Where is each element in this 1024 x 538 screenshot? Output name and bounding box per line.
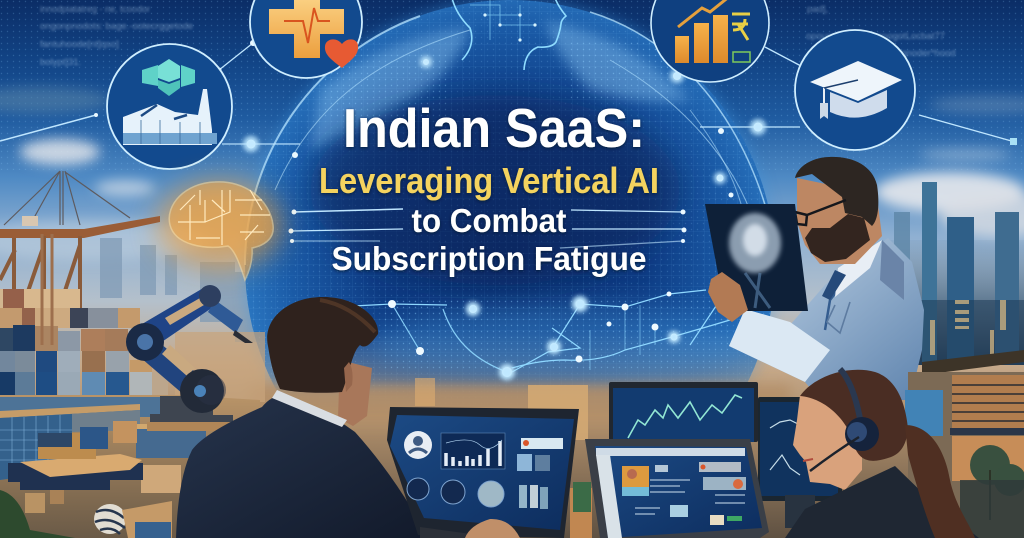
port yard ground xyxy=(0,395,260,538)
port wall with blue glass xyxy=(0,397,170,480)
lower link xyxy=(134,335,205,400)
hexagon cubes xyxy=(142,59,195,96)
hair xyxy=(800,370,908,461)
code text top left: innodpiatatreg - ne, tcoodor xyxy=(40,4,150,14)
jacket xyxy=(785,466,979,538)
right skyline xyxy=(880,182,1024,365)
gauge dials xyxy=(407,478,504,507)
front left laptop xyxy=(387,407,579,538)
medical cross xyxy=(269,0,344,58)
code text top left: fantuhoode[nt]qso] xyxy=(40,39,119,50)
title backdrop glow xyxy=(310,95,680,285)
background data grid xyxy=(0,0,1024,170)
small tree xyxy=(970,445,1010,485)
jacket xyxy=(176,396,428,538)
upper link xyxy=(137,287,216,350)
front right laptop xyxy=(585,439,769,538)
code text top right: opoussflocfallon.opogotLocbat77 xyxy=(806,31,945,42)
title line 1: Indian SaaS: xyxy=(343,97,645,159)
title line 4: Subscription Fatigue xyxy=(332,240,646,277)
dashboard bar chart xyxy=(441,433,505,469)
headset band xyxy=(840,369,862,430)
beard xyxy=(805,214,870,262)
hair xyxy=(795,157,878,226)
icon circle: logistics factory xyxy=(107,44,232,169)
businessman from behind xyxy=(176,297,428,538)
node glows xyxy=(243,56,766,184)
chart dots grid xyxy=(380,300,730,370)
ear xyxy=(344,362,353,392)
lab coat xyxy=(729,238,924,400)
x-ray sheet xyxy=(705,204,808,311)
tassel xyxy=(823,88,825,105)
ui panels xyxy=(635,462,746,525)
stock line xyxy=(628,395,742,438)
trend arrow xyxy=(678,0,730,27)
clouds right xyxy=(875,96,1024,237)
alert banner xyxy=(521,438,563,449)
title line 2: Leveraging Vertical AI xyxy=(319,160,659,201)
distant city left xyxy=(100,238,265,342)
code text top right: ::opoqnoder*hood xyxy=(880,48,956,59)
thumbnail card xyxy=(622,466,649,496)
data viz chart lines lower globe xyxy=(353,285,730,372)
ear cup xyxy=(845,417,879,451)
forearm xyxy=(208,300,243,333)
code text top left xyxy=(40,4,193,68)
warm city band behind desks xyxy=(175,332,790,440)
icon: AI head outline xyxy=(452,0,566,70)
clouds left xyxy=(0,87,210,260)
right window panel xyxy=(905,390,943,436)
ponytail xyxy=(905,425,975,538)
title xyxy=(319,97,659,277)
icon circle: finance chart xyxy=(651,0,769,82)
face xyxy=(797,178,882,264)
rupee symbol xyxy=(732,14,750,40)
profile avatar xyxy=(404,431,432,459)
code text top left: ongonpnodots: bage.-ootecrggetode xyxy=(40,21,193,32)
hand xyxy=(708,272,748,322)
rising bars xyxy=(675,15,728,63)
icon circle: healthcare xyxy=(250,0,362,78)
mic boom xyxy=(810,437,859,471)
pulse line xyxy=(284,8,330,43)
small green counter xyxy=(733,52,750,62)
foliage xyxy=(0,490,75,538)
cap board xyxy=(810,61,902,101)
port truck vehicle xyxy=(8,427,143,513)
factory xyxy=(123,89,217,145)
connector nodes xyxy=(94,40,1017,243)
right chart monitor xyxy=(758,397,842,528)
rooftop and louvers right xyxy=(905,350,1024,538)
code text top right xyxy=(806,4,956,59)
cap base xyxy=(830,90,887,118)
gripper xyxy=(233,330,253,343)
chart glowing nodes xyxy=(388,292,678,377)
container crane xyxy=(0,171,160,325)
heart xyxy=(325,39,358,68)
shirt and tie xyxy=(835,240,882,297)
icon circle: education xyxy=(795,30,915,150)
continent highlights on globe xyxy=(310,22,690,150)
globe xyxy=(238,0,780,396)
laptop keyboard xyxy=(420,527,500,538)
small data panels xyxy=(517,454,550,509)
code text top right: pad], xyxy=(807,4,828,15)
network connector lines xyxy=(0,43,1015,248)
striped drum and crate xyxy=(94,501,172,538)
hand on keyboard xyxy=(465,519,520,538)
joints xyxy=(126,323,164,361)
desk area xyxy=(570,488,592,538)
neck and ear xyxy=(338,360,372,426)
face and neck xyxy=(793,385,862,490)
stethoscope xyxy=(827,302,850,333)
back trading monitor xyxy=(609,382,758,442)
lips xyxy=(803,459,813,461)
hair xyxy=(267,297,378,393)
shipping containers xyxy=(0,234,168,395)
arm base xyxy=(150,396,233,422)
title line 3: to Combat xyxy=(412,202,567,239)
robot arm xyxy=(126,285,253,431)
woman with headset xyxy=(785,369,979,538)
lower globe brighter band xyxy=(370,305,750,385)
glowing brain xyxy=(158,181,282,280)
glasses xyxy=(795,200,846,225)
stacked warehouse blocks xyxy=(113,421,206,493)
shirt collar xyxy=(272,390,347,427)
code text top left: bolypt]31. xyxy=(40,57,81,68)
doctor figure xyxy=(705,157,924,400)
